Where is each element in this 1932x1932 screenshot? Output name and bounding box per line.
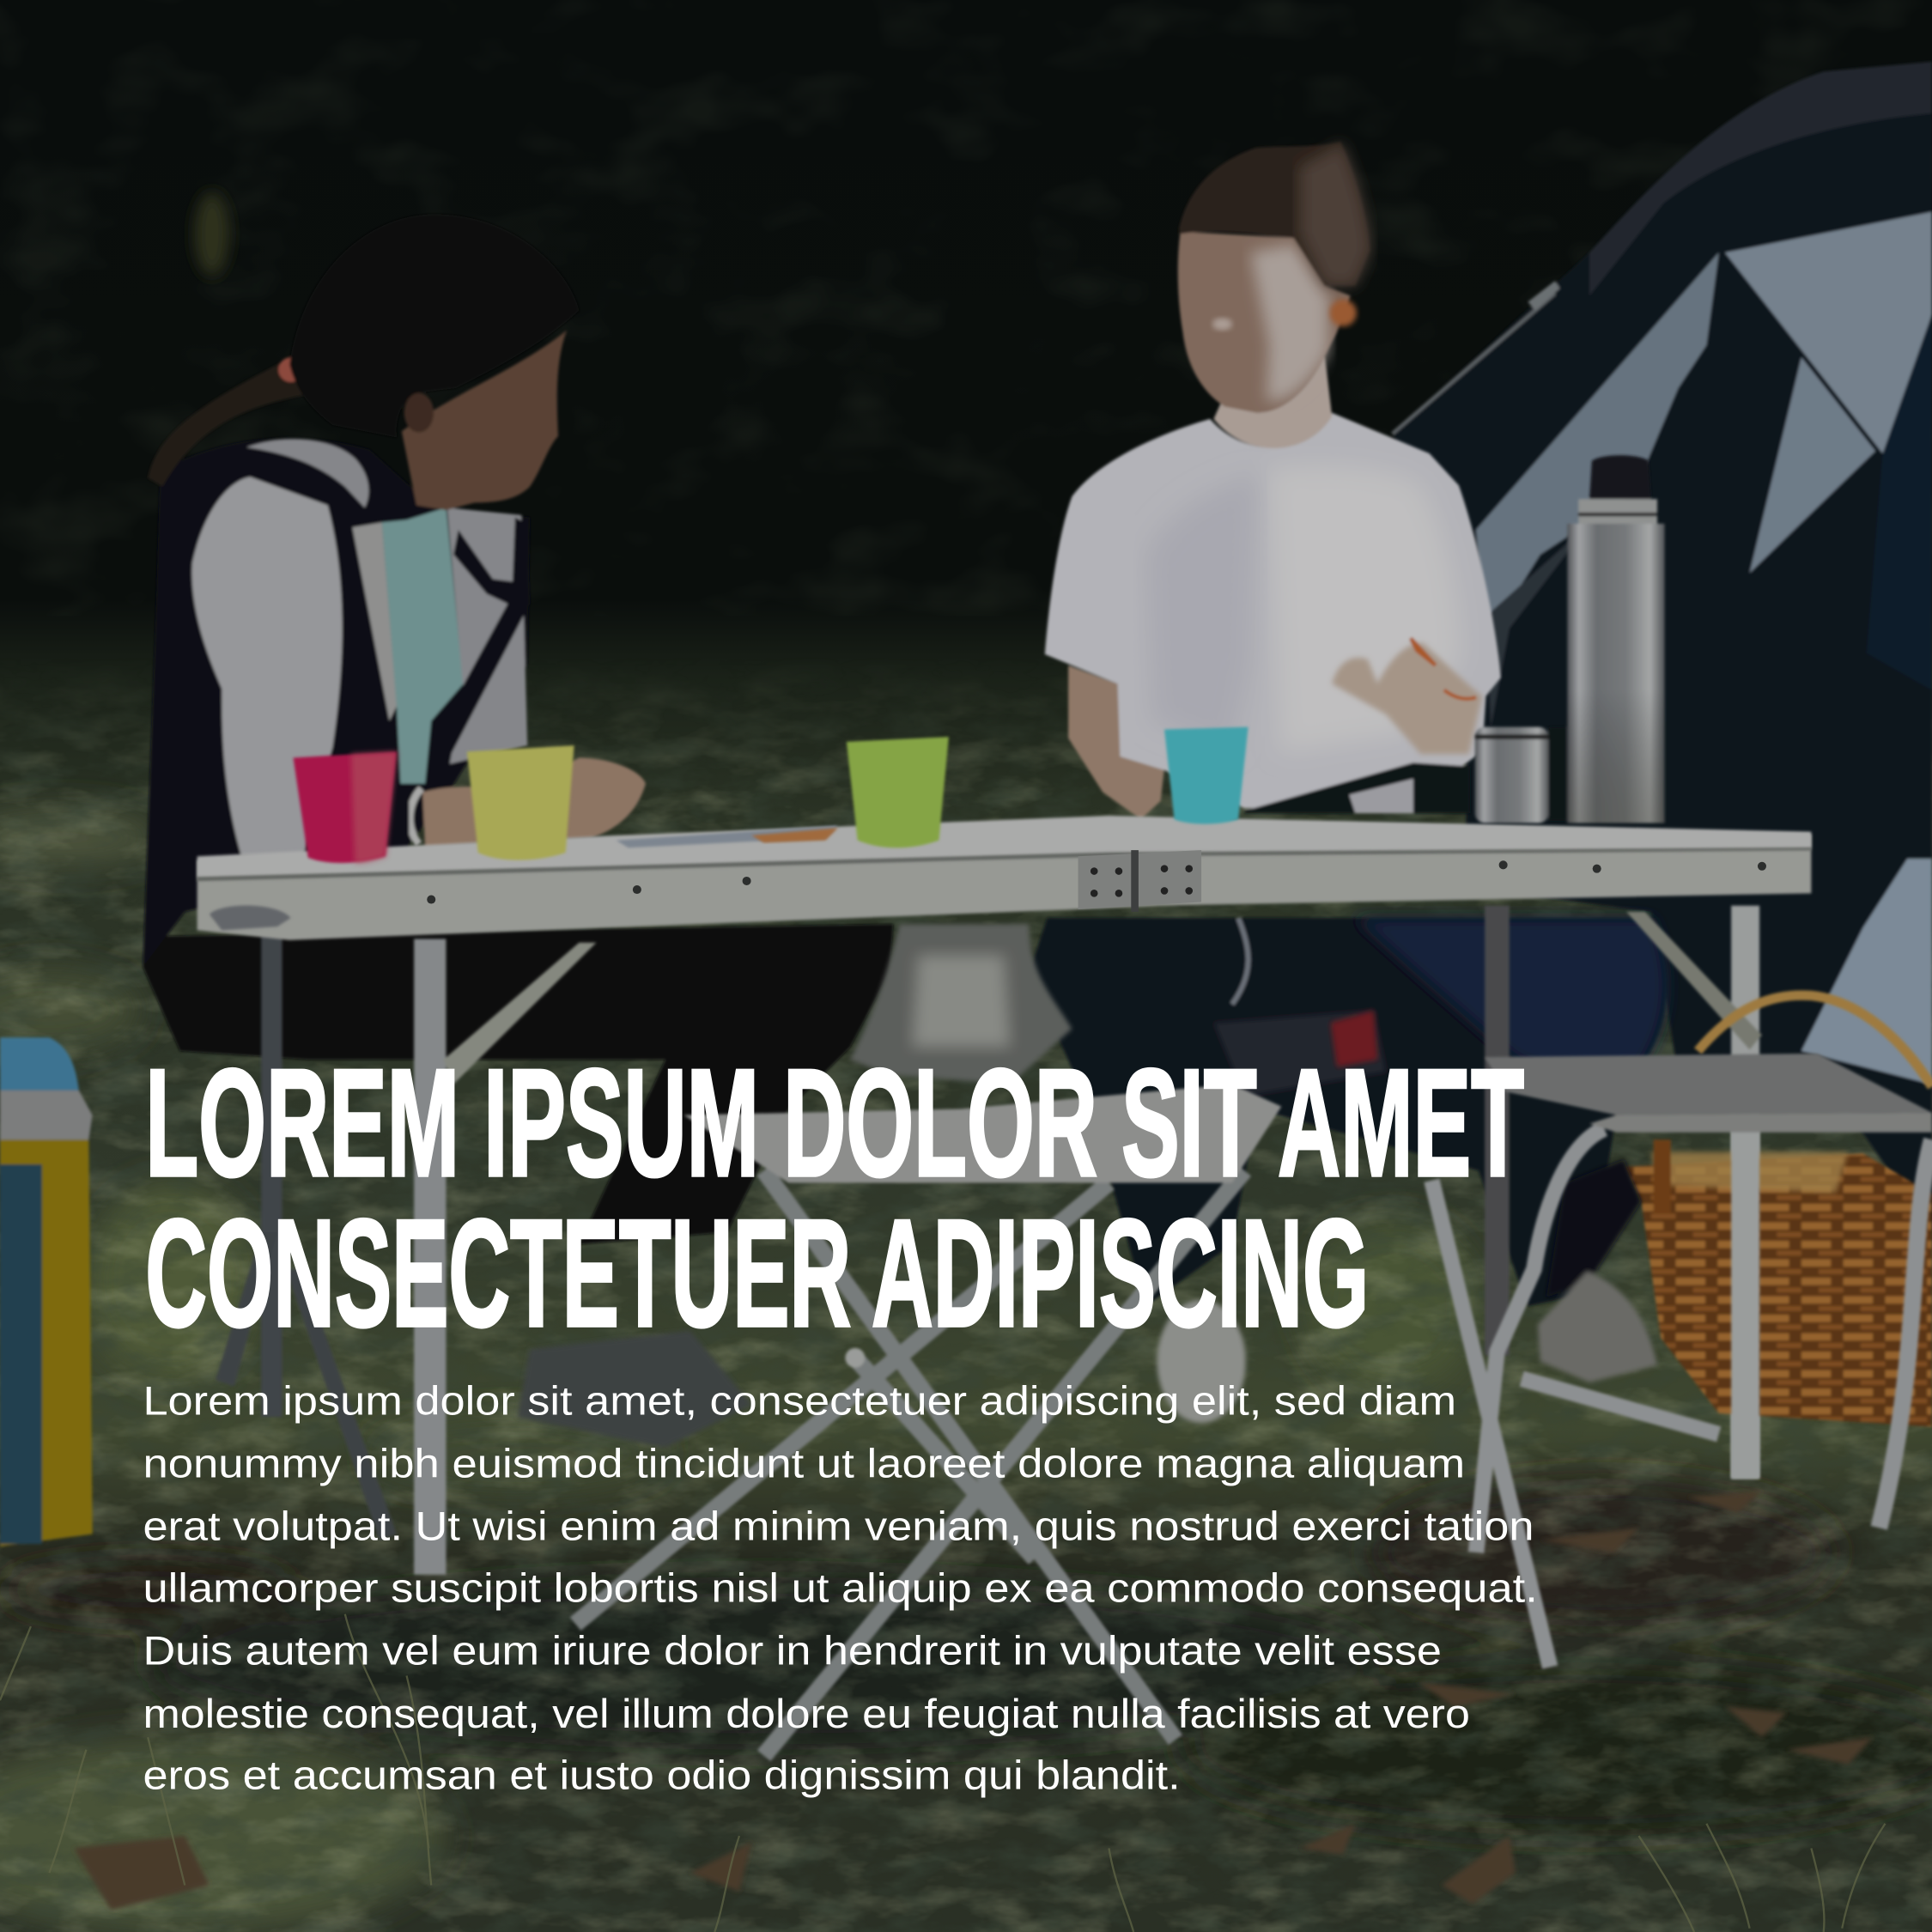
body text: molestie consequat, vel illum dolore eu feugiat nulla facilisis at vero [143, 1692, 1470, 1737]
body text: erat volutpat. Ut wisi enim ad minim veniam, quis nostrud exerci tation [143, 1504, 1534, 1550]
title [145, 1037, 1524, 1358]
body text: ullamcorper suscipit lobortis nisl ut aliquip ex ea commodo consequat. [143, 1565, 1538, 1611]
body text: Lorem ipsum dolor sit amet, consectetuer adipiscing elit, sed diam [143, 1378, 1456, 1424]
hair [1179, 142, 1370, 286]
neck and face [1213, 352, 1332, 448]
hair [289, 215, 579, 437]
ponytail [148, 357, 308, 487]
t-shirt [1045, 413, 1501, 808]
cups [294, 727, 1249, 863]
wicker basket [1624, 995, 1932, 1427]
papers on table [616, 825, 838, 848]
body text: Duis autem vel eum iriure dolor in hendrerit in vulputate velit esse [143, 1629, 1442, 1674]
legs [143, 924, 893, 1244]
foliage highlights [195, 192, 1547, 417]
right jacket panel [447, 507, 527, 764]
grass blades [0, 1614, 1885, 1932]
sleeve [192, 477, 343, 856]
seated boy [1029, 142, 1667, 1306]
jeans [1029, 918, 1667, 1306]
body text: nonummy nibh euismod tincidunt ut laoreet dolore magna aliquam [143, 1442, 1465, 1487]
vest [143, 438, 530, 967]
face and neck [402, 331, 567, 510]
jacket strip [352, 522, 397, 720]
tent [1392, 62, 1932, 1232]
gesturing hand [1332, 643, 1482, 754]
shirt highlight [1269, 466, 1460, 751]
backpack behind table [850, 924, 1072, 1084]
seated girl [143, 215, 893, 1244]
arms [1068, 665, 1164, 819]
cooler [0, 1037, 93, 1546]
right stool [1431, 1054, 1932, 1667]
thermos and steel mug [1475, 455, 1665, 823]
teal shirt [382, 507, 464, 784]
table legs [216, 906, 1762, 1575]
dark foliage texture [0, 0, 1932, 616]
grass noise [0, 592, 1932, 1932]
belt and pouch [1244, 762, 1470, 813]
body text: eros et accumsan et iusto odio dignissim qui blandit. [143, 1753, 1181, 1799]
folding table [197, 816, 1811, 1575]
grass patches [0, 811, 1932, 1932]
boy shoe and lower leg [518, 1159, 1657, 1448]
hood collar [246, 440, 368, 507]
body text [143, 1378, 1538, 1799]
table top [197, 819, 1811, 940]
center stool [575, 1084, 1281, 1756]
hand and bracelet [422, 757, 646, 848]
fallen leaves and twigs [74, 1491, 1873, 1910]
